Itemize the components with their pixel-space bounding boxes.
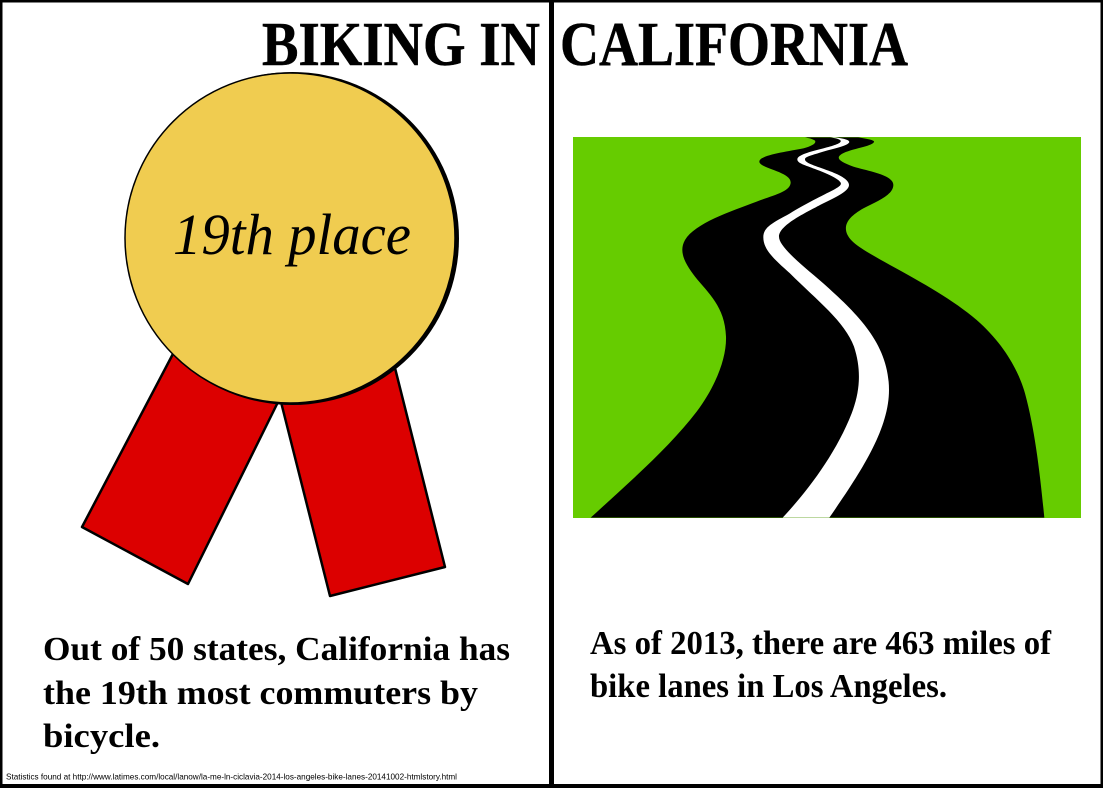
title: BIKING IN xyxy=(262,11,540,79)
ribbon right xyxy=(281,368,445,596)
icon: winding road on green field xyxy=(573,137,1081,518)
text: commuters statistic: bicycle. xyxy=(43,718,160,755)
text: commuters statistic: Out of 50 states, California has xyxy=(43,631,510,668)
medal shadow xyxy=(126,72,459,405)
source note: Statistics found at http://www.latimes.com/local/lanow/la-me-ln-ciclavia-2014-los-angeles-bike-lanes-20141002-htmlstory.html xyxy=(6,772,457,782)
text: commuters statistic: the 19th most commuters by xyxy=(43,675,478,712)
text: bike lanes statistic: As of 2013, there are 463 miles of xyxy=(590,625,1052,662)
title xyxy=(262,11,908,79)
text: bike lanes statistic: bike lanes in Los Angeles. xyxy=(590,668,947,705)
text: bike lanes statistic xyxy=(590,625,1052,705)
text: commuters statistic xyxy=(43,631,510,755)
medal disc xyxy=(125,73,455,403)
title: CALIFORNIA xyxy=(560,11,908,79)
medal label: 19th place xyxy=(173,202,411,267)
icon: medal with ribbons xyxy=(82,72,459,596)
road surface xyxy=(591,137,1044,518)
road centre line xyxy=(763,137,889,518)
ribbon left xyxy=(82,350,279,584)
